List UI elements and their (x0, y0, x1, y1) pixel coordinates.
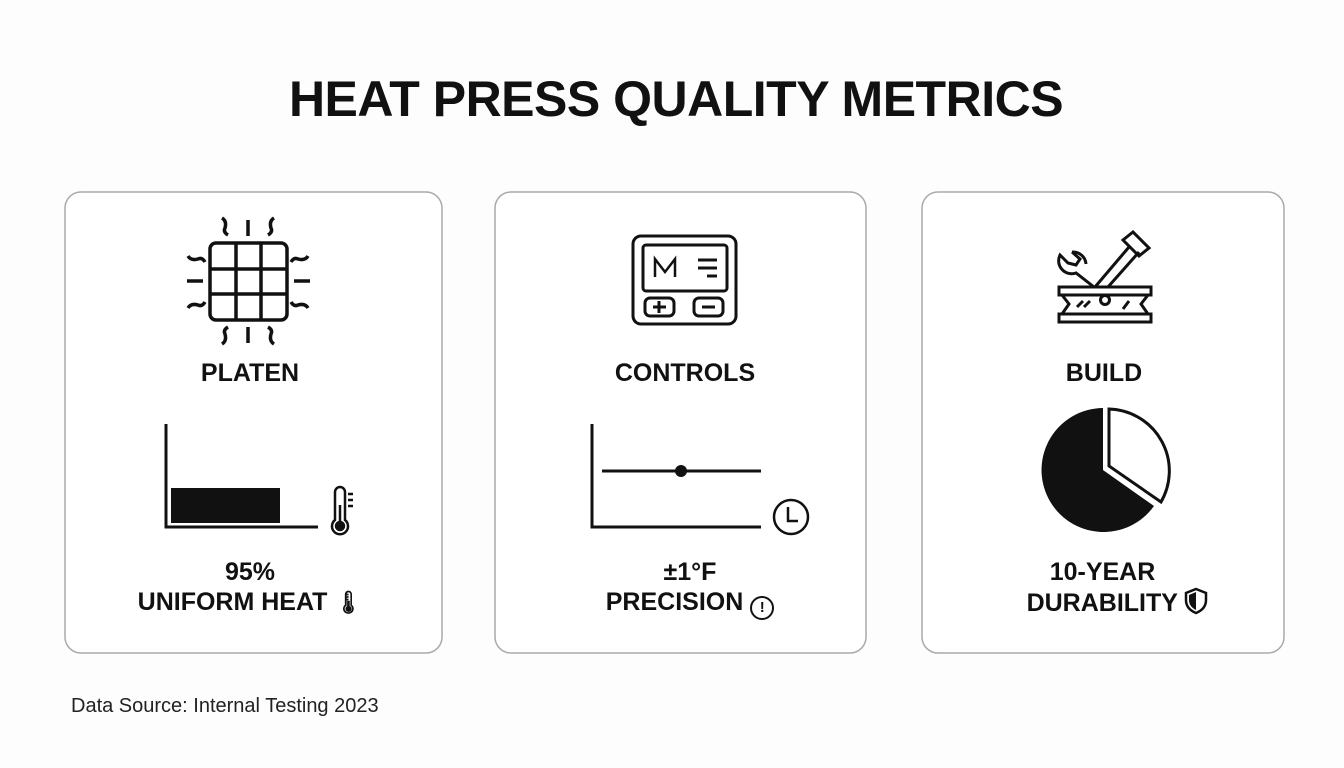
heading: build: BUILD (1066, 359, 1142, 387)
heading: controls: CONTROLS (615, 359, 755, 387)
panel: controls (495, 192, 866, 653)
metric: precision (606, 558, 774, 620)
icon: tools and beam (1059, 232, 1151, 322)
metric: precision: ! (760, 599, 765, 616)
panel: platen (65, 192, 442, 653)
title: HEAT PRESS QUALITY METRICS (289, 71, 1063, 127)
icon: thermometer (332, 487, 353, 534)
icon: control panel (633, 236, 736, 324)
metric: durability (1027, 558, 1208, 617)
metric: precision: ±1°F (664, 558, 716, 586)
metric: uniform heat: UNIFORM HEAT 🌡 (138, 588, 362, 616)
bar chart (166, 424, 318, 527)
metric: precision: PRECISION (606, 588, 743, 616)
line chart (592, 424, 761, 527)
metric: durability: 10-YEAR (1050, 558, 1155, 586)
metric: uniform heat: 95% (225, 558, 275, 586)
heading: platen: PLATEN (201, 359, 299, 387)
icon: clock (774, 500, 808, 534)
pie chart (1042, 408, 1169, 532)
panel: build (922, 192, 1284, 653)
footer: data source: Data Source: Internal Testing 2023 (71, 695, 379, 717)
metric: uniform heat (138, 558, 362, 616)
metric: durability: DURABILITY (1027, 589, 1178, 617)
icon: platen grid (187, 218, 310, 344)
